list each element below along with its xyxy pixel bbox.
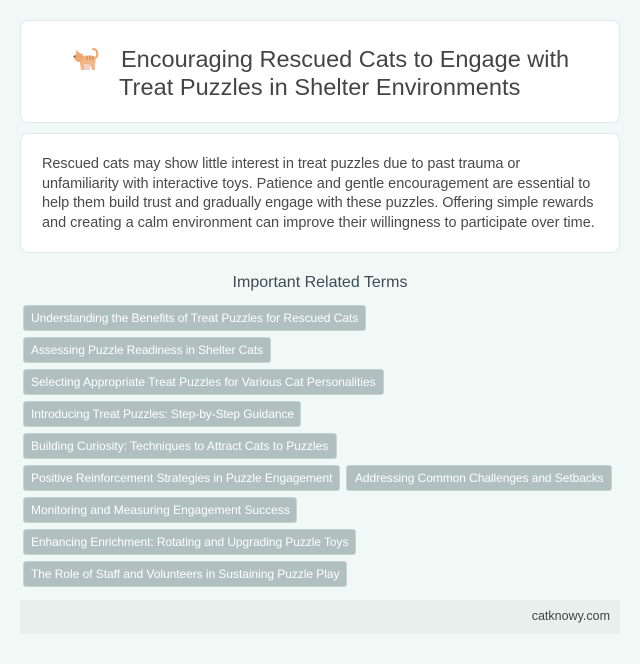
tag: Assessing Puzzle Readiness in Shelter Cats: [31, 343, 263, 357]
intro paragraph text: Rescued cats may show little interest in treat puzzles due to past trauma or: [42, 156, 520, 172]
tag: [23, 561, 347, 587]
tag: Enhancing Enrichment: Rotating and Upgrading Puzzle Toys: [31, 535, 348, 549]
title text: [119, 46, 569, 100]
intro paragraph text: help them build trust and gradually engage with these puzzles. Offering simple rewards: [42, 195, 593, 211]
tag: [23, 401, 301, 427]
section heading: Important Related Terms: [233, 274, 407, 291]
tag: [23, 529, 356, 555]
tag: Understanding the Benefits of Treat Puzzles for Rescued Cats: [31, 311, 358, 325]
tag: Selecting Appropriate Treat Puzzles for Various Cat Personalities: [31, 375, 376, 389]
related terms tags: [23, 305, 612, 587]
tag: [23, 369, 384, 395]
tag: Monitoring and Measuring Engagement Success: [31, 503, 290, 517]
intro paragraph text: and creating a calm environment can improve their willingness to participate over time.: [42, 215, 595, 231]
intro paragraph text: [42, 156, 595, 231]
tag: [23, 433, 337, 459]
tag: [23, 337, 271, 363]
intro paragraph panel: [20, 133, 620, 253]
tag: The Role of Staff and Volunteers in Sustaining Puzzle Play: [31, 567, 339, 581]
tag: Addressing Common Challenges and Setbacks: [355, 471, 604, 485]
footer site name: catknowy.com: [532, 609, 610, 623]
tag: [346, 465, 612, 491]
title panel: [20, 20, 620, 123]
icon: orange cat: [74, 48, 98, 70]
tag: [23, 465, 340, 491]
intro paragraph text: unfamiliarity with interactive toys. Patience and gentle encouragement are essential to: [42, 176, 590, 192]
tag: Introducing Treat Puzzles: Step-by-Step Guidance: [31, 407, 294, 421]
tag: Building Curiosity: Techniques to Attract Cats to Puzzles: [31, 439, 328, 453]
footer bar: [20, 600, 620, 634]
tag: [23, 497, 297, 523]
title text: Encouraging Rescued Cats to Engage with: [121, 46, 569, 72]
tag: [23, 305, 366, 331]
tag: Positive Reinforcement Strategies in Puzzle Engagement: [31, 471, 332, 485]
title text: Treat Puzzles in Shelter Environments: [119, 74, 520, 100]
